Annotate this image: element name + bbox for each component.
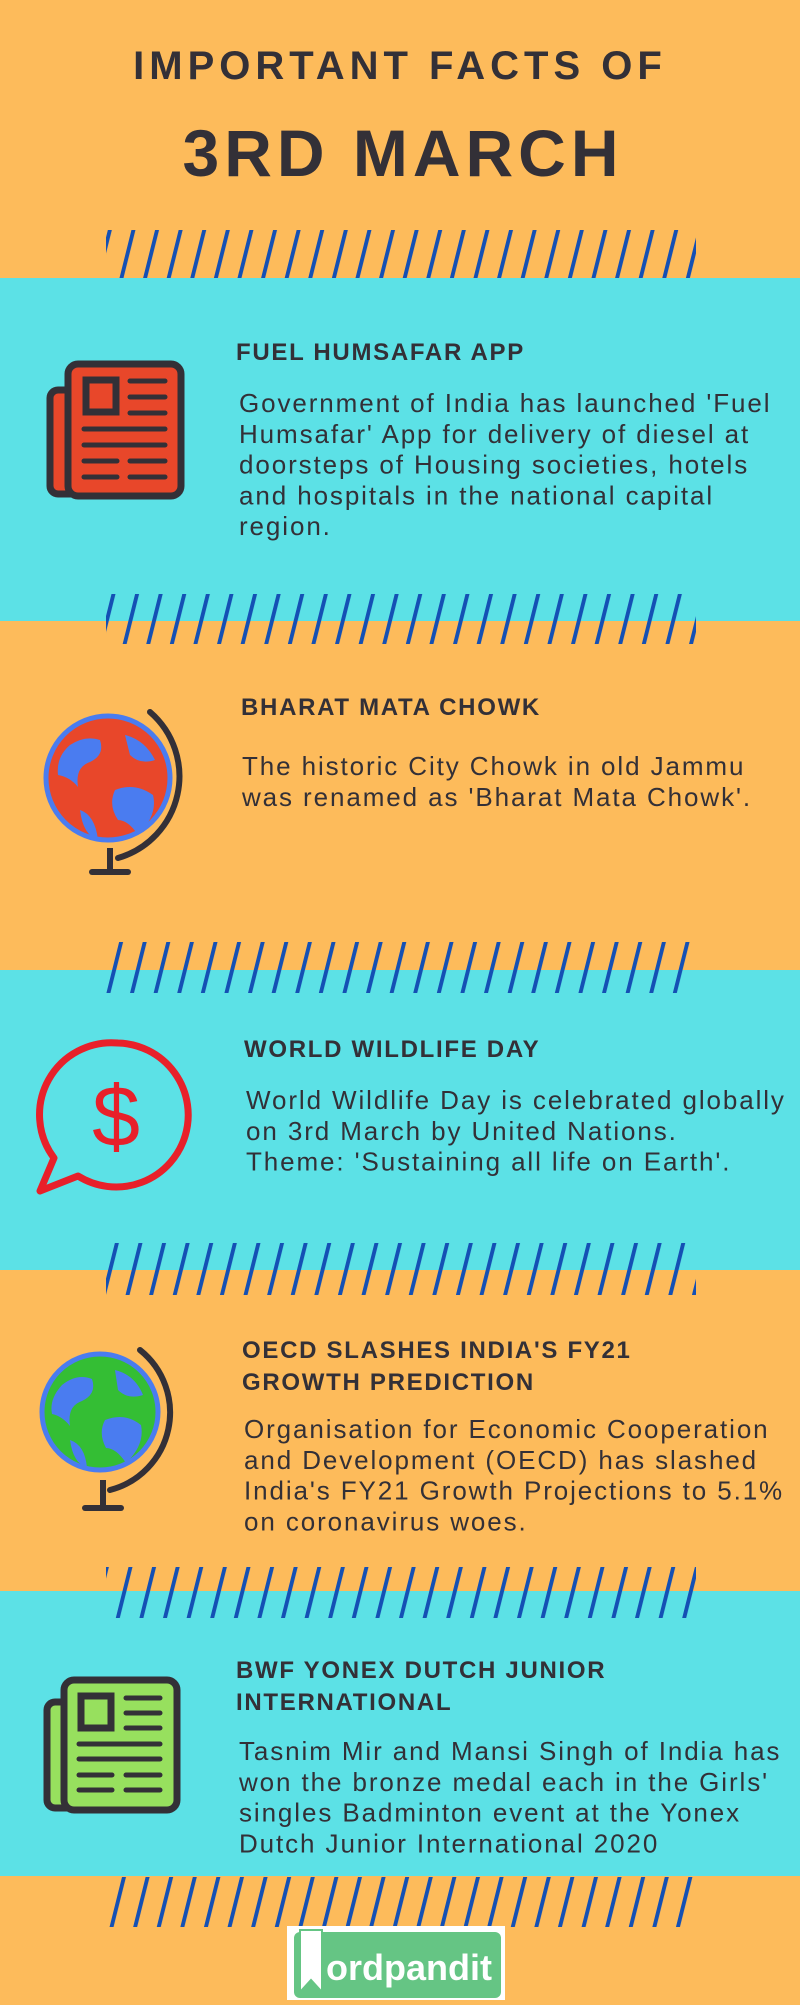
text: fuel humsafar: region. xyxy=(239,511,332,541)
icon: dollar speech bubble: $ xyxy=(92,1069,140,1165)
logo: wordpandit: ordpandit xyxy=(326,1947,492,1988)
icon: newspaper red xyxy=(50,364,181,496)
text: world wildlife day: World Wildlife Day is celebrated globally xyxy=(246,1085,786,1115)
icon: dollar speech bubble xyxy=(40,1043,188,1191)
text: oecd: India's FY21 Growth Projections to 5.1% xyxy=(244,1476,784,1506)
text: bwf: won the bronze medal each in the Girls' xyxy=(238,1767,769,1797)
icon: globe green xyxy=(42,1350,170,1508)
text: world wildlife day: Theme: 'Sustaining all life on Earth'. xyxy=(246,1147,731,1177)
heading: bwf: BWF YONEX DUTCH JUNIOR xyxy=(236,1657,606,1684)
heading: bharat mata chowk: BHARAT MATA CHOWK xyxy=(241,694,541,721)
icon: newspaper green xyxy=(47,1680,177,1810)
text: bwf: Dutch Junior International 2020 xyxy=(239,1828,659,1858)
text: bharat mata chowk: The historic City Chowk in old Jammu xyxy=(242,751,745,781)
title xyxy=(133,44,667,190)
text: world wildlife day: on 3rd March by United Nations. xyxy=(246,1116,678,1146)
heading: bwf: INTERNATIONAL xyxy=(236,1689,452,1716)
text: fuel humsafar: and hospitals in the national capital xyxy=(239,480,714,510)
panel: world wildlife background xyxy=(0,970,800,1270)
panel: fuel humsafar background xyxy=(0,278,800,621)
heading: fuel humsafar: FUEL HUMSAFAR APP xyxy=(236,339,525,366)
logo: wordpandit xyxy=(287,1926,505,2000)
heading: oecd: OECD SLASHES INDIA'S FY21 xyxy=(242,1337,632,1364)
text: bharat mata chowk: was renamed as 'Bharat Mata Chowk'. xyxy=(241,782,752,812)
icon: globe red xyxy=(46,712,179,872)
panel: bwf background xyxy=(0,1591,800,1876)
text: fuel humsafar: Humsafar' App for delivery of diesel at xyxy=(239,419,750,449)
text: oecd: on coronavirus woes. xyxy=(244,1506,528,1536)
text: bwf: Tasnim Mir and Mansi Singh of India has xyxy=(239,1736,781,1766)
text: fuel humsafar: doorsteps of Housing societies, hotels xyxy=(239,450,749,480)
text: fuel humsafar: Government of India has launched 'Fuel xyxy=(239,388,771,418)
text: oecd: and Development (OECD) has slashed xyxy=(244,1445,758,1475)
text: oecd: Organisation for Economic Cooperation xyxy=(244,1414,770,1444)
title: 3RD MARCH xyxy=(182,116,624,190)
text: bwf: singles Badminton event at the Yonex xyxy=(239,1798,741,1828)
title: IMPORTANT FACTS OF xyxy=(133,44,667,88)
heading: oecd: GROWTH PREDICTION xyxy=(242,1369,535,1396)
heading: world wildlife day: WORLD WILDLIFE DAY xyxy=(244,1036,540,1063)
